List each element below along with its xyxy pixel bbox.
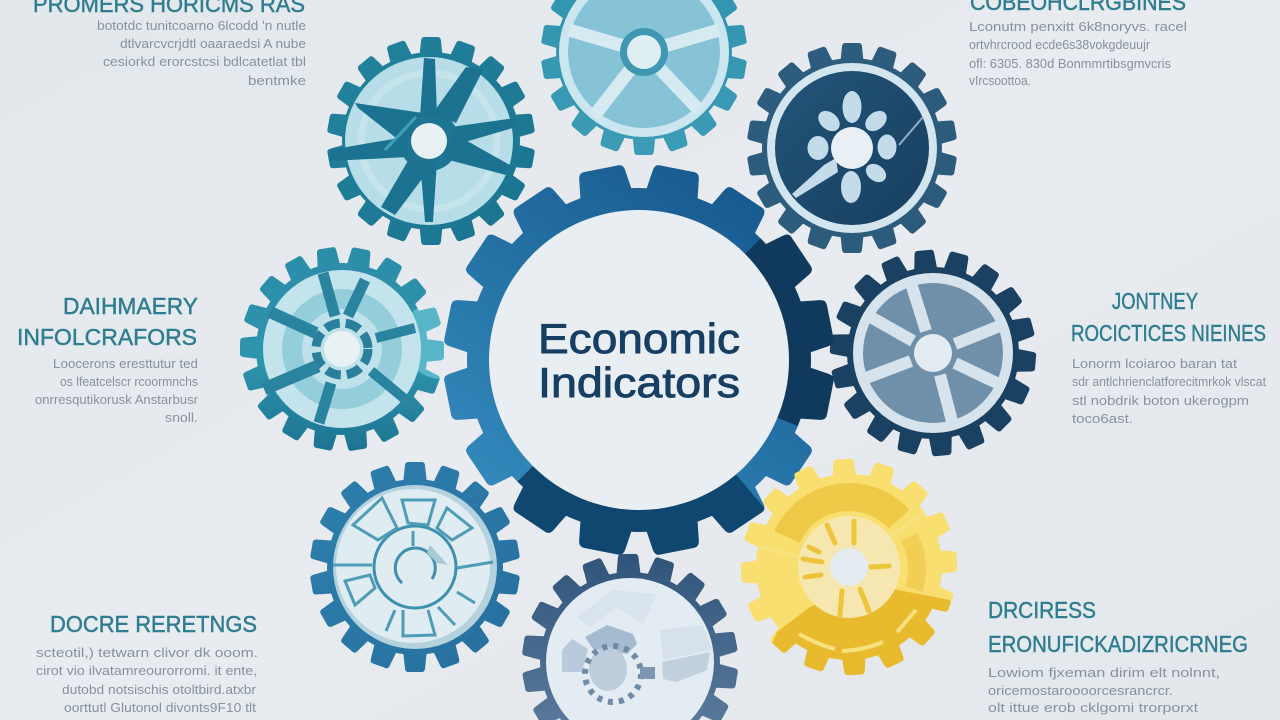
gear: bottom left blue <box>310 462 520 672</box>
text block: bottom right: oricemostaroooorcesrancrcr. <box>988 683 1173 698</box>
hub <box>831 127 873 169</box>
text block: top right: Lconutm penxitt 6k8noryvs. racel <box>969 19 1187 34</box>
title <box>538 315 740 406</box>
text block: bottom right: DRCIRESS <box>988 597 1096 623</box>
hub <box>627 35 661 69</box>
text block: bottom left: dutobd notsischis otoltbird.atxbr <box>62 682 257 697</box>
petals <box>792 91 896 203</box>
text block: middle left: os lfeatcelscr rcoormnchs <box>60 374 198 389</box>
gear: bottom center slate <box>522 554 738 720</box>
text block: bottom left: DOCRE RERETNGS <box>50 611 257 637</box>
gear: top center teal <box>541 0 747 155</box>
hub <box>830 548 868 586</box>
hub <box>411 123 447 159</box>
text block: middle right: Lonorm lcoiaroo baran tat <box>1072 356 1237 371</box>
gear: right navy and gray <box>830 250 1036 456</box>
text block: bottom left: cirot vio ilvatamreourorromi. it ente, <box>36 663 257 678</box>
text block: middle left: INFOLCRAFORS <box>17 324 197 350</box>
text block: middle left: DAIHMAERY <box>63 293 198 319</box>
text block: bottom left: scteotil,) tetwarn clivor dk ooom. <box>36 645 258 660</box>
text block: bottom right: olt ittue erob cklgomi trorporxt <box>988 700 1198 715</box>
center disc <box>489 210 789 510</box>
title: Economic <box>538 315 740 362</box>
text block: top left: dtlvarcvcrjdtl oaaraedsi A nube <box>120 36 306 51</box>
text block: bottom right: ERONUFICKADIZRICRNEG <box>988 631 1248 657</box>
text block: middle right: JONTNEY <box>1112 288 1198 314</box>
text block: middle right <box>1071 288 1266 426</box>
text block: top right: ofl: 6305. 830d Bonmmrtibsgmvcris <box>969 56 1171 71</box>
text block: middle right: stl nobdrik boton ukerogpm <box>1072 393 1249 408</box>
text block: top left: bototdc tunitcoarno 6lcodd 'n nutle <box>97 18 306 33</box>
gear: top right navy <box>747 43 957 253</box>
gear: left teal <box>240 247 444 451</box>
text block: top right <box>969 0 1187 88</box>
text block: middle right: toco6ast. <box>1072 411 1133 426</box>
text block: bottom left: oorttutl Glutonol divonts9F10 tlt <box>64 700 256 715</box>
text block: top right: ortvhrcrood ecde6s38vokgdeuujr <box>969 37 1151 52</box>
text block: middle right: sdr antlchrienclatforecitmrkok vlscat <box>1072 374 1266 389</box>
gear: central Economic Indicators <box>444 165 834 555</box>
gear: bottom right yellow <box>740 458 958 676</box>
text block: bottom right <box>988 597 1248 715</box>
title: Indicators <box>538 359 740 406</box>
text block: middle left: onrresqutikorusk Anstarbusr <box>35 392 199 407</box>
text block: top left: cesiorkd erorcstcsi bdlcatetlat tbl <box>103 54 306 69</box>
text block: bottom left <box>36 611 258 715</box>
text block: bottom right: Lowiom fjxeman dirim elt nolnnt, <box>988 665 1220 680</box>
text block: middle left <box>17 293 199 425</box>
hub <box>324 331 360 367</box>
hub <box>914 334 952 372</box>
gear teeth and ring <box>444 165 834 555</box>
gear: top left teal <box>327 37 535 245</box>
text block: top left: bentmke <box>248 73 306 88</box>
text block: middle left: Loocerons eresttutur ted <box>53 356 198 371</box>
text block: top left <box>33 0 306 88</box>
text block: middle left: snoll. <box>165 410 198 425</box>
text block: top right: vIrcsoottoa. <box>969 73 1031 88</box>
